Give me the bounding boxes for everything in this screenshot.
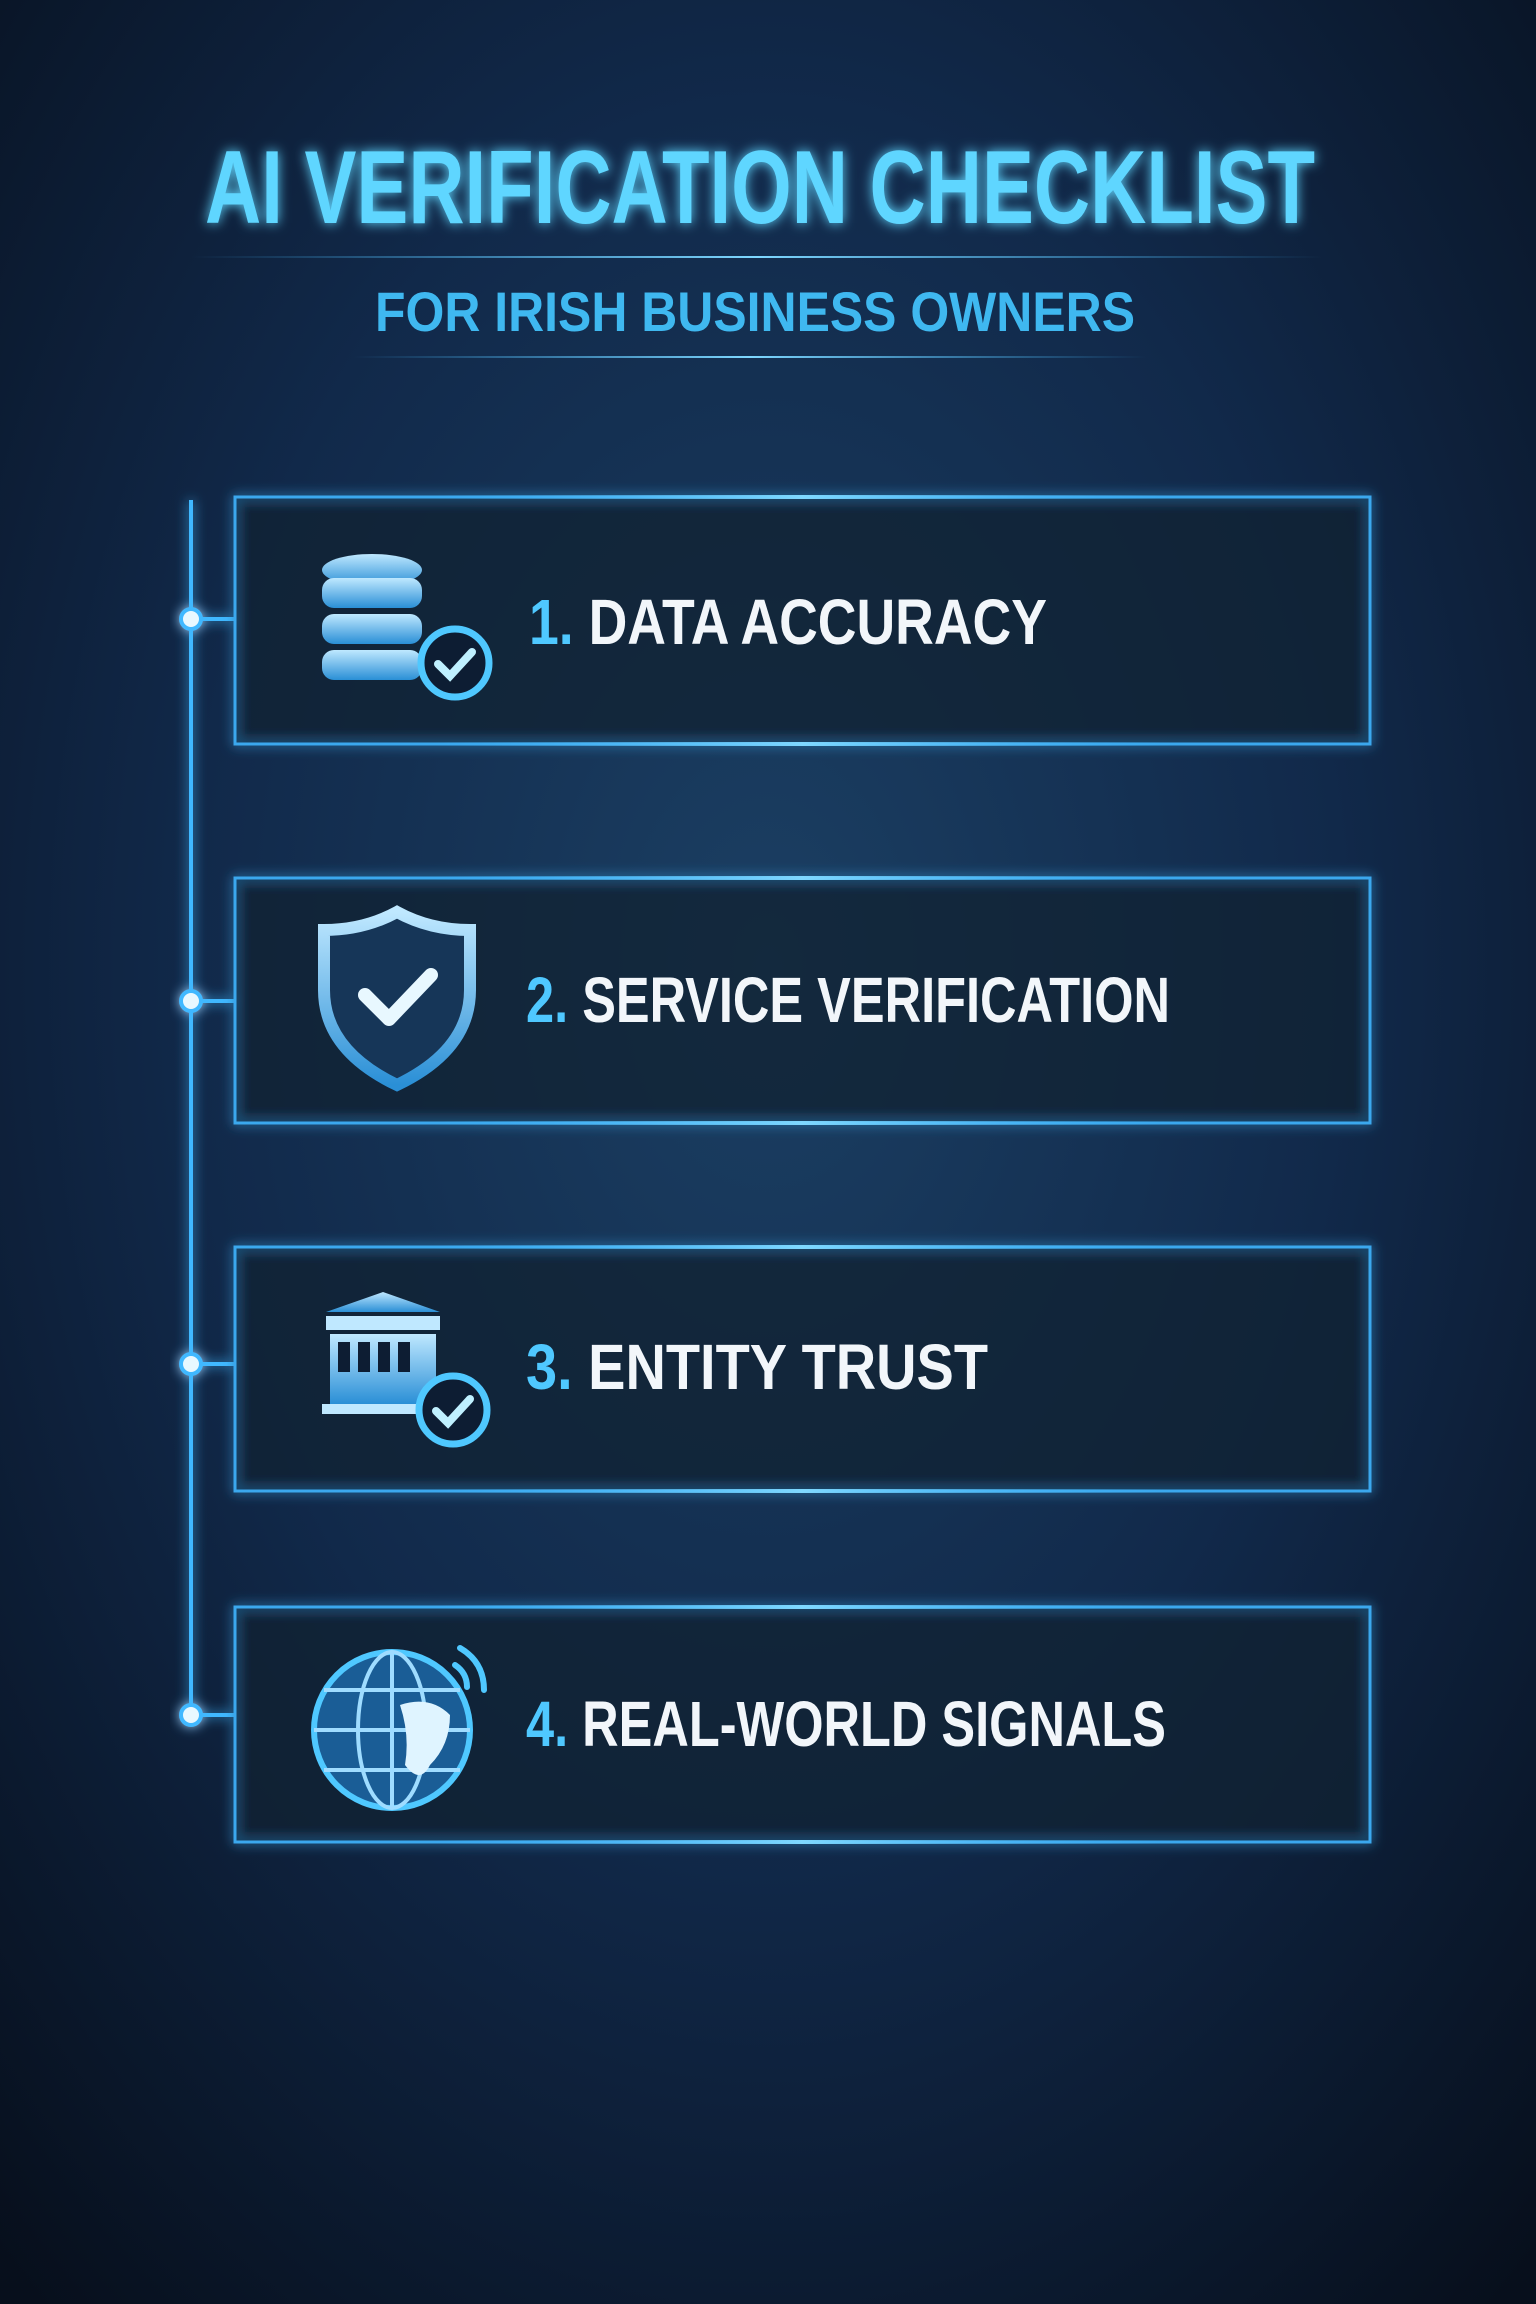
heading 2: 2. SERVICE VERIFICATION: [526, 964, 1170, 1036]
panel: entity trust: [235, 1245, 1370, 1493]
subtitle: FOR IRISH BUSINESS OWNERS: [375, 280, 1135, 343]
panel: real-world signals: [235, 1605, 1370, 1844]
icon: database check: [322, 554, 489, 697]
icon: building check: [322, 1292, 487, 1444]
heading 4: 4. REAL-WORLD SIGNALS: [526, 1688, 1166, 1760]
heading 1: 1. DATA ACCURACY: [529, 586, 1047, 658]
panel: data accuracy: [235, 495, 1370, 746]
timeline: [181, 500, 235, 1725]
icon: shield: [324, 912, 470, 1085]
icon: globe signal: [314, 1648, 484, 1808]
heading 3: 3. ENTITY TRUST: [526, 1331, 988, 1403]
panel: service verification: [235, 876, 1370, 1125]
